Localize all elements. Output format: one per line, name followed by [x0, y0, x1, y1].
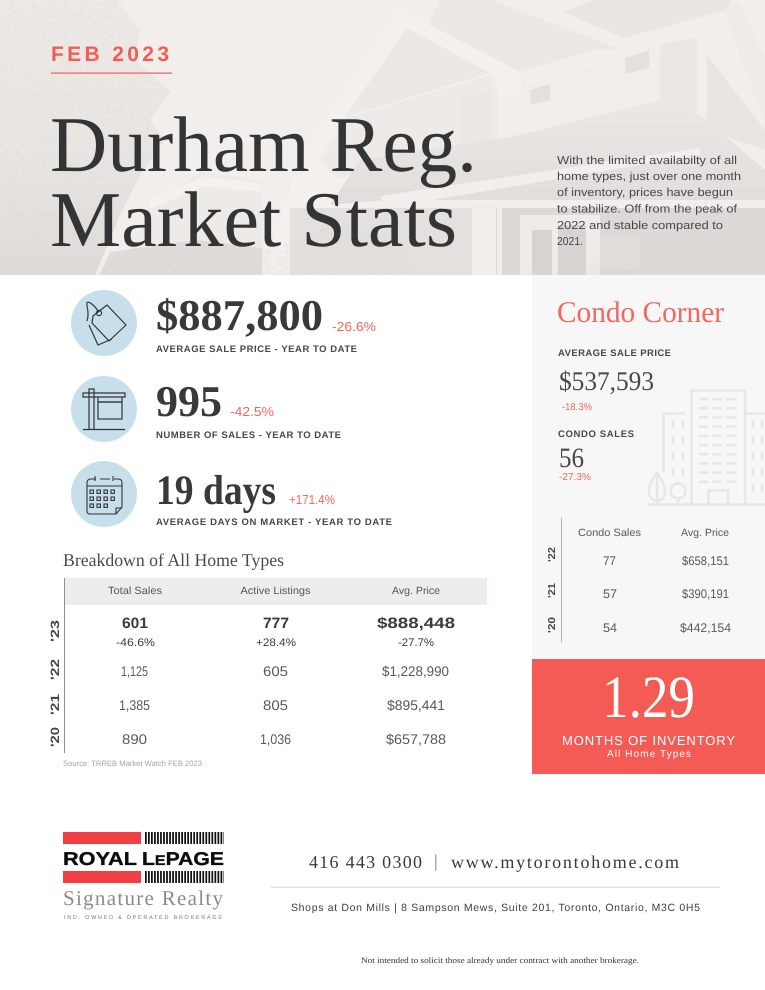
stat: number of sales: 995	[156, 377, 222, 426]
condo table: '22	[547, 547, 558, 562]
logo: Royal LePage Signature Realty	[63, 832, 224, 921]
condo sales: 56	[559, 443, 584, 474]
stat: average sale price	[71, 290, 376, 356]
stat: number of sales: NUMBER OF SALES - YEAR TO DATE	[156, 430, 341, 441]
condo sales: CONDO SALES	[558, 429, 634, 440]
table header: Avg. Price	[392, 585, 440, 597]
condo table: '20	[547, 616, 558, 633]
panel: condo corner	[547, 296, 765, 642]
year labels: '20	[48, 727, 62, 747]
rows 2022 to 2020: $1,228,990	[382, 663, 449, 679]
date heading: FEB 2023	[51, 43, 169, 66]
rows 2022 to 2020: $895,441	[387, 697, 445, 713]
foreground shrubs	[262, 245, 596, 270]
logo: Royal LePage Signature Realty: LEPAGE	[142, 848, 224, 869]
condo sales: -27.3%	[559, 472, 591, 483]
neighbouring house	[100, 172, 262, 275]
row 2023: -27.7%	[398, 637, 434, 649]
stat: days on market: AVERAGE DAYS ON MARKET - YEAR TO DATE	[156, 517, 392, 528]
condo table: $658,151	[682, 554, 729, 568]
condo table: Condo Sales	[578, 527, 641, 539]
condo average sale price: AVERAGE SALE PRICE	[558, 348, 671, 359]
condo table: Avg. Price	[681, 527, 729, 539]
intro paragraph: 2022 and stable compared to	[557, 220, 723, 232]
rows 2022 to 2020: 805	[263, 697, 288, 713]
table header: Active Listings	[240, 585, 310, 597]
title: Durham Reg.	[50, 102, 477, 189]
intro paragraph	[557, 155, 741, 248]
condo heading: Condo Corner	[557, 296, 724, 329]
row 2023: +28.4%	[256, 637, 296, 649]
stat: days on market	[71, 461, 392, 528]
icon: calendar	[71, 461, 137, 527]
condo average sale price	[558, 348, 671, 413]
panel: header photo	[0, 0, 765, 275]
stat: days on market: 19 days	[156, 468, 276, 514]
stat: number of sales: -42.5%	[230, 404, 274, 419]
tree foliage	[0, 0, 175, 275]
condo table: '21	[547, 583, 558, 598]
intro paragraph: of inventory, prices have begun	[557, 187, 733, 199]
year labels: '23	[48, 620, 62, 642]
stat: days on market: +171.4%	[289, 492, 335, 507]
condo average sale price: $537,593	[559, 366, 654, 396]
rows 2022 to 2020: 605	[263, 663, 288, 679]
rows 2022 to 2020: $657,788	[386, 731, 446, 747]
condo average sale price: -18.3%	[562, 402, 592, 413]
condo table: $390,191	[682, 587, 729, 601]
contact line: www.mytorontohome.com	[451, 852, 679, 872]
intro paragraph: With the limited availabilty of all	[557, 155, 737, 167]
intro paragraph: to stabilize. Off from the peak of	[557, 204, 738, 216]
stat: average sale price: AVERAGE SALE PRICE - YEAR TO DATE	[156, 344, 357, 355]
row 2023: 601	[122, 615, 148, 632]
source note: Source: TRREB Market Watch FEB 2023	[63, 759, 202, 768]
stat: average sale price: $887,800	[156, 291, 323, 340]
contact line: |	[434, 851, 438, 871]
year labels: '21	[48, 694, 62, 715]
icon: price tags	[71, 290, 137, 356]
intro paragraph: 2021.	[557, 236, 583, 248]
row 2023: $888,448	[377, 615, 455, 632]
title: Market Stats	[50, 177, 457, 264]
year labels: '22	[48, 659, 62, 680]
rows 2022 to 2020: 1,036	[260, 731, 291, 747]
breakdown heading: Breakdown of All Home Types	[63, 550, 284, 570]
contact line	[309, 851, 679, 872]
logo: Royal LePage Signature Realty: IND. OWNED & OPERATED BROKERAGE	[64, 915, 222, 921]
callout: months of inventory	[532, 659, 765, 774]
condo table: $442,154	[680, 621, 731, 635]
icon: for sale sign	[71, 376, 137, 442]
row 2023: 777	[263, 615, 289, 632]
rows 2022 to 2020	[119, 663, 449, 747]
condo table: 77	[603, 554, 616, 568]
icon: city buildings watermark	[647, 390, 765, 504]
callout: months of inventory: 1.29	[602, 664, 695, 730]
year labels	[48, 620, 62, 747]
intro paragraph: home types, just over one month	[557, 171, 741, 183]
condo table: 57	[603, 587, 617, 601]
callout: months of inventory: MONTHS OF INVENTORY	[562, 733, 735, 748]
address: Shops at Don Mills | 8 Sampson Mews, Suite 201, Toronto, Ontario, M3C 0H5	[291, 902, 700, 914]
condo table	[547, 518, 731, 642]
disclaimer: Not intended to solicit those already under contract with another brokerage.	[361, 955, 639, 965]
condo table: 54	[603, 621, 617, 635]
panel: condo background	[532, 275, 765, 659]
panel: breakdown of all home types	[48, 550, 487, 768]
rows 2022 to 2020: 1,385	[119, 697, 150, 713]
table header: Total Sales	[108, 585, 162, 597]
logo: Royal LePage Signature Realty: Signature Realty	[63, 886, 224, 910]
stat: number of sales	[71, 376, 341, 442]
callout: months of inventory: All Home Types	[607, 749, 691, 760]
main house	[262, 0, 765, 275]
rows 2022 to 2020: 890	[122, 731, 147, 747]
logo: Royal LePage Signature Realty: ROYAL	[63, 848, 137, 869]
title	[50, 102, 477, 264]
contact line: 416 443 0300	[309, 852, 422, 872]
rows 2022 to 2020: 1,125	[121, 663, 148, 679]
row 2023	[116, 615, 455, 649]
row 2023: -46.6%	[116, 637, 155, 649]
condo sales	[558, 429, 634, 483]
table header	[65, 578, 487, 605]
stat: average sale price: -26.6%	[332, 319, 376, 334]
